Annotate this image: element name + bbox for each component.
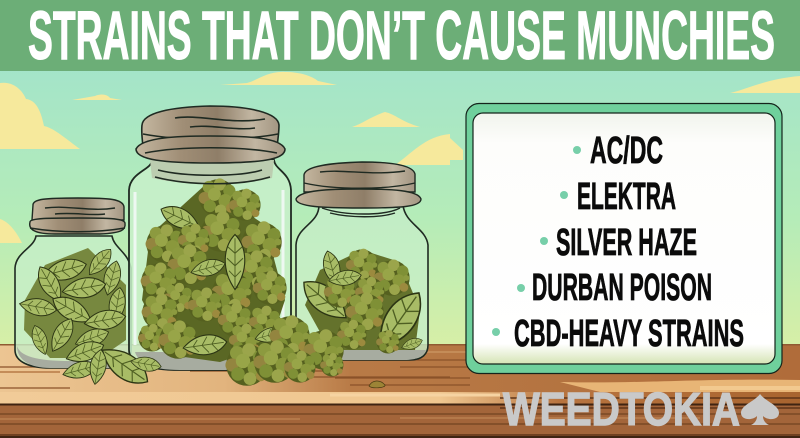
jar: left with leaves (15, 198, 131, 368)
header banner (0, 0, 800, 71)
loose leaves on table (61, 337, 162, 392)
center jar neck shading (150, 160, 274, 184)
left jar base (17, 346, 120, 368)
left jar glass (15, 236, 131, 368)
left jar leaves (18, 245, 128, 358)
bullet: AC/DC: AC/DC (590, 130, 663, 172)
right jar glass (296, 205, 428, 360)
icon: spade (741, 394, 779, 425)
sky background (0, 60, 800, 350)
center jar lid (136, 106, 285, 184)
bullet: Elektra (560, 176, 676, 218)
right jar lid (296, 162, 421, 217)
bullet: Elektra: ELEKTRA (577, 176, 676, 218)
bullet: Silver Haze: SILVER HAZE (556, 222, 697, 264)
wooden table (0, 344, 800, 438)
center jar glass (129, 160, 291, 370)
bullet: Silver Haze (540, 222, 697, 264)
center jar highlight (135, 190, 283, 345)
bullet: Durban Poison (517, 267, 712, 309)
left jar lid (30, 198, 125, 234)
watermark logo (503, 383, 779, 435)
center jar buds (138, 178, 287, 362)
loose buds on table (225, 315, 344, 386)
jar: center with buds (129, 106, 291, 370)
jar: right with buds (296, 162, 431, 360)
panel green frame (466, 104, 782, 374)
right jar base (300, 350, 426, 360)
panel white card (473, 113, 775, 364)
bullet: AC/DC (573, 130, 663, 172)
clouds (0, 72, 800, 243)
center jar base (135, 352, 287, 370)
panel: strain list (466, 104, 782, 374)
right jar buds (296, 249, 431, 355)
small crumb on table (369, 381, 385, 388)
watermark wordmark: WEEDTOKIA (503, 383, 740, 435)
